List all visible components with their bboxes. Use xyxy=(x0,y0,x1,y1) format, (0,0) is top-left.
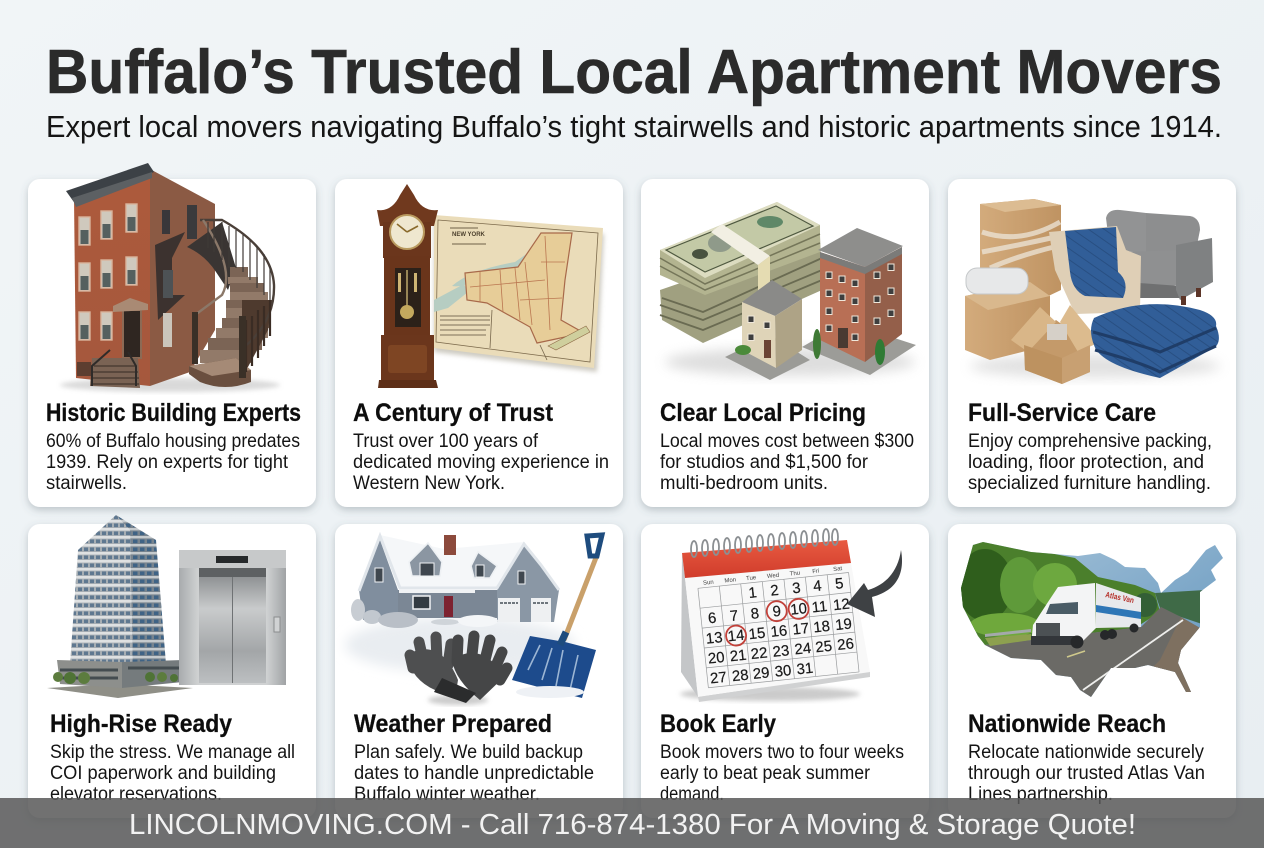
heading: Historic Building Experts xyxy=(46,399,301,427)
panel: full-service care xyxy=(948,179,1236,507)
calendar grid: Tue xyxy=(746,575,757,582)
calendar grid: 23 xyxy=(772,642,790,661)
calendar grid: 31 xyxy=(796,660,814,678)
panel: clear local pricing xyxy=(641,179,929,507)
calendar grid: 11 xyxy=(811,598,828,616)
icon: grandfather clock and map of New York: NEW YORK xyxy=(452,232,486,238)
calendar grid: 3 xyxy=(791,580,802,597)
description: demand. xyxy=(660,784,724,805)
heading: Weather Prepared xyxy=(354,710,552,738)
calendar grid: 7 xyxy=(729,607,739,625)
description: 1939. Rely on experts for tight xyxy=(46,452,289,473)
description: dates to handle unpredictable xyxy=(354,763,594,784)
description: Plan safely. We build backup xyxy=(354,742,583,763)
panel: nationwide reach xyxy=(948,524,1236,818)
description: multi-bedroom units. xyxy=(660,473,828,494)
calendar grid: 26 xyxy=(836,635,855,654)
calendar grid: 6 xyxy=(707,610,717,627)
heading: Full-Service Care xyxy=(968,399,1156,427)
calendar grid: 19 xyxy=(834,615,853,634)
calendar grid: Fri xyxy=(812,569,820,575)
folded moving blankets xyxy=(1091,304,1219,378)
calendar grid: 2 xyxy=(770,582,780,600)
calendar grid: 1 xyxy=(748,584,758,602)
icon: high-rise tower and elevator doors xyxy=(47,515,286,698)
wrapped armchair xyxy=(1049,226,1141,314)
description: Buffalo winter weather. xyxy=(354,784,540,805)
calendar grid: 18 xyxy=(812,618,831,636)
spiral binding rings xyxy=(691,529,838,557)
stair top landing xyxy=(187,222,236,290)
calendar grid: 27 xyxy=(709,669,728,687)
description xyxy=(353,431,609,494)
calendar grid xyxy=(697,566,859,688)
description: through our trusted Atlas Van xyxy=(968,763,1205,784)
calendar grid: 21 xyxy=(729,647,747,665)
icon: money stacks and apartment buildings xyxy=(660,202,916,380)
description: loading, floor protection, and xyxy=(968,452,1204,473)
footer call-to-action bar xyxy=(0,798,1264,848)
calendar grid: 30 xyxy=(774,662,792,681)
calendar grid: Wed xyxy=(767,573,779,580)
panel: a century of trust xyxy=(335,179,623,507)
shovel xyxy=(512,535,602,698)
description: COI paperwork and building xyxy=(50,763,276,784)
small building xyxy=(725,335,810,380)
panel: weather prepared xyxy=(335,524,623,818)
description: Enjoy comprehensive packing, xyxy=(968,431,1212,452)
calendar grid: 9 xyxy=(772,603,782,621)
calendar grid: 8 xyxy=(750,605,760,623)
lower stack xyxy=(660,235,822,343)
heading: A Century of Trust xyxy=(353,399,554,427)
description: Trust over 100 years of xyxy=(353,431,539,452)
footer call-to-action bar: LINCOLNMOVING.COM - Call 716-874-1380 For A Moving & Storage Quote! xyxy=(129,809,1136,841)
map silhouette scene xyxy=(955,540,1230,700)
description xyxy=(660,431,914,494)
description: Skip the stress. We manage all xyxy=(50,742,295,763)
description: early to beat peak summer xyxy=(660,763,871,784)
description: for studios and $1,500 for xyxy=(660,452,869,473)
calendar grid: Sun xyxy=(703,580,714,587)
description xyxy=(968,742,1205,805)
stair steps xyxy=(200,267,271,363)
icon: brick building with spiral staircase xyxy=(60,163,280,392)
lower box xyxy=(965,282,1050,360)
calendar grid: Thu xyxy=(790,571,800,578)
calendar grid: 16 xyxy=(770,622,788,641)
calendar grid: Sat xyxy=(833,566,843,573)
calendar grid: 15 xyxy=(748,625,766,643)
description: Lines partnership. xyxy=(968,784,1113,805)
panel: book early xyxy=(641,524,929,818)
description: Local moves cost between $300 xyxy=(660,431,914,452)
calendar grid: 22 xyxy=(750,644,768,663)
calendar grid: 24 xyxy=(794,640,812,659)
description xyxy=(968,431,1212,494)
description xyxy=(50,742,295,805)
gloves xyxy=(406,636,507,705)
panel: high-rise ready xyxy=(28,515,316,818)
icon: grandfather clock and map of New York xyxy=(377,184,604,388)
title: Buffalo’s Trusted Local Apartment Movers xyxy=(46,38,1222,107)
description xyxy=(660,742,904,805)
icon: desk calendar with circled dates and arrow xyxy=(680,529,902,702)
icon: snowy house, gloves and shovel xyxy=(345,535,602,705)
description: elevator reservations. xyxy=(50,784,222,805)
heading: Book Early xyxy=(660,710,776,738)
description: dedicated moving experience in xyxy=(353,452,609,473)
calendar grid: 13 xyxy=(705,629,723,648)
tall box xyxy=(980,199,1061,300)
sofa xyxy=(1106,210,1146,253)
calendar grid: 25 xyxy=(815,638,833,656)
calendar grid: 14 xyxy=(727,627,745,645)
description: Book movers two to four weeks xyxy=(660,742,904,763)
heading: Nationwide Reach xyxy=(968,710,1166,738)
open cardboard box xyxy=(1024,320,1090,384)
tall building xyxy=(802,322,916,375)
calendar grid: 12 xyxy=(832,596,851,614)
description: Relocate nationwide securely xyxy=(968,742,1204,763)
heading: High-Rise Ready xyxy=(50,710,232,738)
calendar grid: Mon xyxy=(724,577,736,584)
description: Western New York. xyxy=(353,473,505,494)
heading: Clear Local Pricing xyxy=(660,399,866,427)
calendar grid: 4 xyxy=(812,577,822,595)
calendar grid: 10 xyxy=(789,600,808,619)
description xyxy=(354,742,594,805)
calendar grid: 5 xyxy=(834,575,844,593)
calendar grid: 29 xyxy=(752,664,770,683)
icon: moving boxes, wrapped chair, sofa and blankets xyxy=(965,199,1220,384)
panel: historic building experts xyxy=(28,163,316,507)
truck xyxy=(1031,583,1141,648)
calendar grid: 20 xyxy=(707,649,726,668)
description: specialized furniture handling. xyxy=(968,473,1211,494)
upper stack xyxy=(660,202,820,295)
arrow xyxy=(847,550,902,617)
description: 60% of Buffalo housing predates xyxy=(46,431,300,452)
icon: truck on highway inside US map silhouette xyxy=(955,540,1230,700)
calendar grid: 28 xyxy=(731,667,749,685)
description xyxy=(46,431,300,494)
calendar grid: 17 xyxy=(792,620,810,639)
subtitle: Expert local movers navigating Buffalo’s tight stairwells and historic apartments since 1914. xyxy=(46,109,1222,144)
description: stairwells. xyxy=(46,473,127,494)
truck: Atlas Van xyxy=(1105,590,1135,605)
